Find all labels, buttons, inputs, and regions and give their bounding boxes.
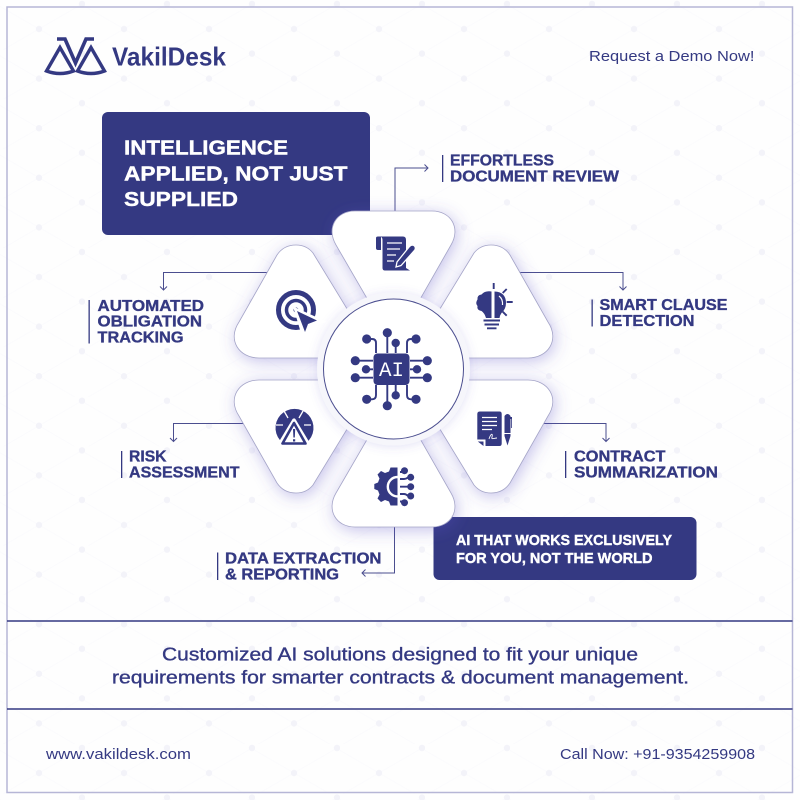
- icon: document review scroll and pen: [376, 236, 415, 270]
- label: automated obligation tracking: [88, 298, 204, 346]
- callout text: AI THAT WORKS EXCLUSIVELY: [456, 533, 672, 549]
- icon: AI chip: [351, 328, 432, 410]
- panel: callout box: [434, 517, 696, 580]
- label: contract summarization: CONTRACT: [574, 448, 666, 466]
- label: effortless document review: [442, 152, 620, 186]
- footer: website: www.vakildesk.com: [45, 746, 191, 763]
- icon: gear with data nodes: [374, 467, 414, 506]
- label: data extraction and reporting: [217, 550, 382, 584]
- text block: summary statement: Customized AI solutions designed to fit your unique: [162, 644, 638, 664]
- icon: target with cursor: [278, 292, 320, 336]
- headline text: SUPPLIED: [124, 189, 238, 211]
- headline text: INTELLIGENCE: [124, 138, 288, 160]
- icon: scales logo mark: [46, 39, 104, 74]
- arrow: document review connector: [395, 164, 428, 212]
- panel: tile lower left: [234, 380, 377, 493]
- text block: summary statement: requirements for smarter contracts & document management.: [112, 668, 689, 688]
- label: automated obligation tracking: OBLIGATION: [98, 314, 202, 330]
- brand name: VakilDesk: [112, 42, 227, 72]
- icon: brain light bulb: [476, 283, 513, 328]
- icon: signed contract and pen: [477, 412, 512, 446]
- label: automated obligation tracking: TRACKING: [98, 330, 184, 346]
- panel: tile lower right: [410, 380, 553, 493]
- label: contract summarization: SUMMARIZATION: [574, 464, 718, 482]
- label: data extraction and reporting: DATA EXTRACTION: [225, 550, 382, 568]
- label: smart clause detection: [592, 297, 728, 330]
- label: effortless document review: EFFORTLESS: [450, 152, 554, 170]
- arrow: data extraction connector: [362, 526, 394, 576]
- panel: tile top: [332, 211, 455, 345]
- callout text: [456, 533, 672, 567]
- panel: tile upper right: [410, 245, 553, 358]
- headline text: APPLIED, NOT JUST: [124, 164, 348, 186]
- panel: central AI hub: [317, 292, 470, 446]
- label: smart clause detection: DETECTION: [600, 313, 694, 330]
- label: risk assessment: [121, 448, 240, 482]
- label: risk assessment: RISK: [129, 448, 167, 466]
- logo: VakilDesk: [46, 39, 227, 74]
- label: contract summarization: [565, 448, 718, 482]
- text block: summary statement: [112, 644, 689, 688]
- label: automated obligation tracking: AUTOMATED: [98, 298, 204, 315]
- label: risk assessment: ASSESSMENT: [129, 464, 240, 482]
- callout text: FOR YOU, NOT THE WORLD: [456, 551, 652, 567]
- panel: headline box: [102, 112, 370, 235]
- arrow: obligation tracking connector: [160, 272, 267, 290]
- headline text: [124, 138, 348, 211]
- panel: tile bottom: [332, 393, 455, 527]
- icon: risk gauge with warning: [276, 409, 314, 446]
- arrow: clause detection connector: [520, 272, 626, 290]
- arrow: risk assessment connector: [170, 424, 243, 442]
- label: data extraction and reporting: & REPORTING: [225, 566, 339, 584]
- icon: AI chip: AI: [379, 360, 404, 383]
- arrow: summarization connector: [544, 424, 610, 442]
- label: smart clause detection: SMART CLAUSE: [600, 297, 728, 314]
- footer: phone number: Call Now: +91-9354259908: [560, 746, 755, 763]
- request a demo link: Request a Demo Now!: [589, 48, 754, 65]
- panel: tile upper left: [234, 245, 377, 358]
- label: effortless document review: DOCUMENT REVIEW: [450, 168, 620, 186]
